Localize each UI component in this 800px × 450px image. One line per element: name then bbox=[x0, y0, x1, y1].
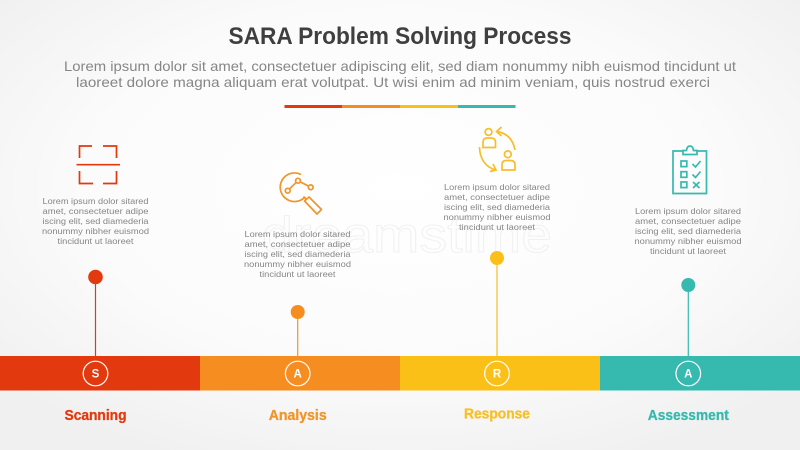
panel: scanning bbox=[42, 146, 149, 357]
response description: tincidunt ut laoreet bbox=[459, 222, 536, 232]
segment: response: R bbox=[493, 369, 502, 381]
segment: assessment: A bbox=[684, 369, 692, 381]
subtitle: laoreet dolore magna aliquam erat volutpat. Ut wisi enim ad minim veniam, quis nostrud exerci bbox=[76, 74, 710, 90]
assessment description bbox=[634, 206, 742, 256]
response description: Lorem ipsum dolor sitared bbox=[444, 182, 550, 192]
assessment description: tincidunt ut laoreet bbox=[650, 246, 727, 256]
segment: scanning bbox=[0, 356, 200, 390]
response description: iscing elit, sed diamederia bbox=[444, 202, 550, 212]
scanning description: Lorem ipsum dolor sitared bbox=[42, 196, 149, 206]
response description: nonummy nibher euismod bbox=[444, 212, 551, 222]
subtitle bbox=[64, 58, 736, 90]
segment: assessment bbox=[600, 356, 800, 390]
assessment description: amet, consectetuer adipe bbox=[635, 216, 741, 226]
scanning description: iscing elit, sed diamederia bbox=[42, 216, 149, 226]
title: SARA Problem Solving Process bbox=[228, 23, 572, 50]
segment: analysis: A bbox=[294, 369, 302, 381]
scanning description: tincidunt ut laoreet bbox=[58, 236, 134, 246]
scanning marker bbox=[88, 270, 103, 357]
analysis description bbox=[244, 229, 351, 279]
watermark: dreamstime bbox=[262, 207, 552, 263]
icon: checklist clipboard bbox=[673, 146, 706, 194]
panel: assessment bbox=[634, 146, 742, 357]
panel: response bbox=[444, 127, 551, 357]
label: scanning: Scanning bbox=[64, 407, 126, 424]
response description: amet, consectetuer adipe bbox=[444, 192, 550, 202]
assessment marker bbox=[681, 278, 695, 357]
scanning description: nonummy nibher euismod bbox=[42, 226, 149, 236]
scanning description: amet, consectetuer adipe bbox=[42, 206, 149, 216]
analysis description: Lorem ipsum dolor sitared bbox=[244, 229, 351, 239]
panel: analysis bbox=[244, 173, 351, 357]
analysis description: tincidunt ut laoreet bbox=[260, 269, 336, 279]
response description bbox=[444, 182, 551, 232]
label: assessment: Assessment bbox=[648, 407, 729, 424]
assessment description: iscing elit, sed diamederia bbox=[635, 226, 741, 236]
title divider bbox=[284, 105, 516, 108]
icon: scan frame bbox=[76, 146, 120, 184]
segment: scanning: S bbox=[92, 369, 100, 381]
subtitle: Lorem ipsum dolor sit amet, consectetuer adipiscing elit, sed diam nonummy nibh euismod tincidunt ut bbox=[64, 58, 736, 74]
response marker bbox=[490, 251, 504, 357]
scanning description bbox=[42, 196, 149, 246]
timeline band bbox=[0, 356, 800, 390]
analysis description: nonummy nibher euismod bbox=[244, 259, 351, 269]
analysis description: amet, consectetuer adipe bbox=[244, 239, 351, 249]
icon: exchanging people bbox=[480, 127, 515, 172]
assessment description: nonummy nibher euismod bbox=[634, 236, 742, 246]
analysis description: iscing elit, sed diamederia bbox=[244, 249, 351, 259]
icon: magnifier with nodes bbox=[280, 173, 322, 214]
segment: analysis bbox=[200, 356, 400, 390]
analysis marker bbox=[291, 305, 305, 357]
segment: response bbox=[400, 356, 600, 390]
label: response: Response bbox=[464, 406, 530, 422]
assessment description: Lorem ipsum dolor sitared bbox=[635, 206, 741, 216]
label: analysis: Analysis bbox=[269, 407, 327, 424]
